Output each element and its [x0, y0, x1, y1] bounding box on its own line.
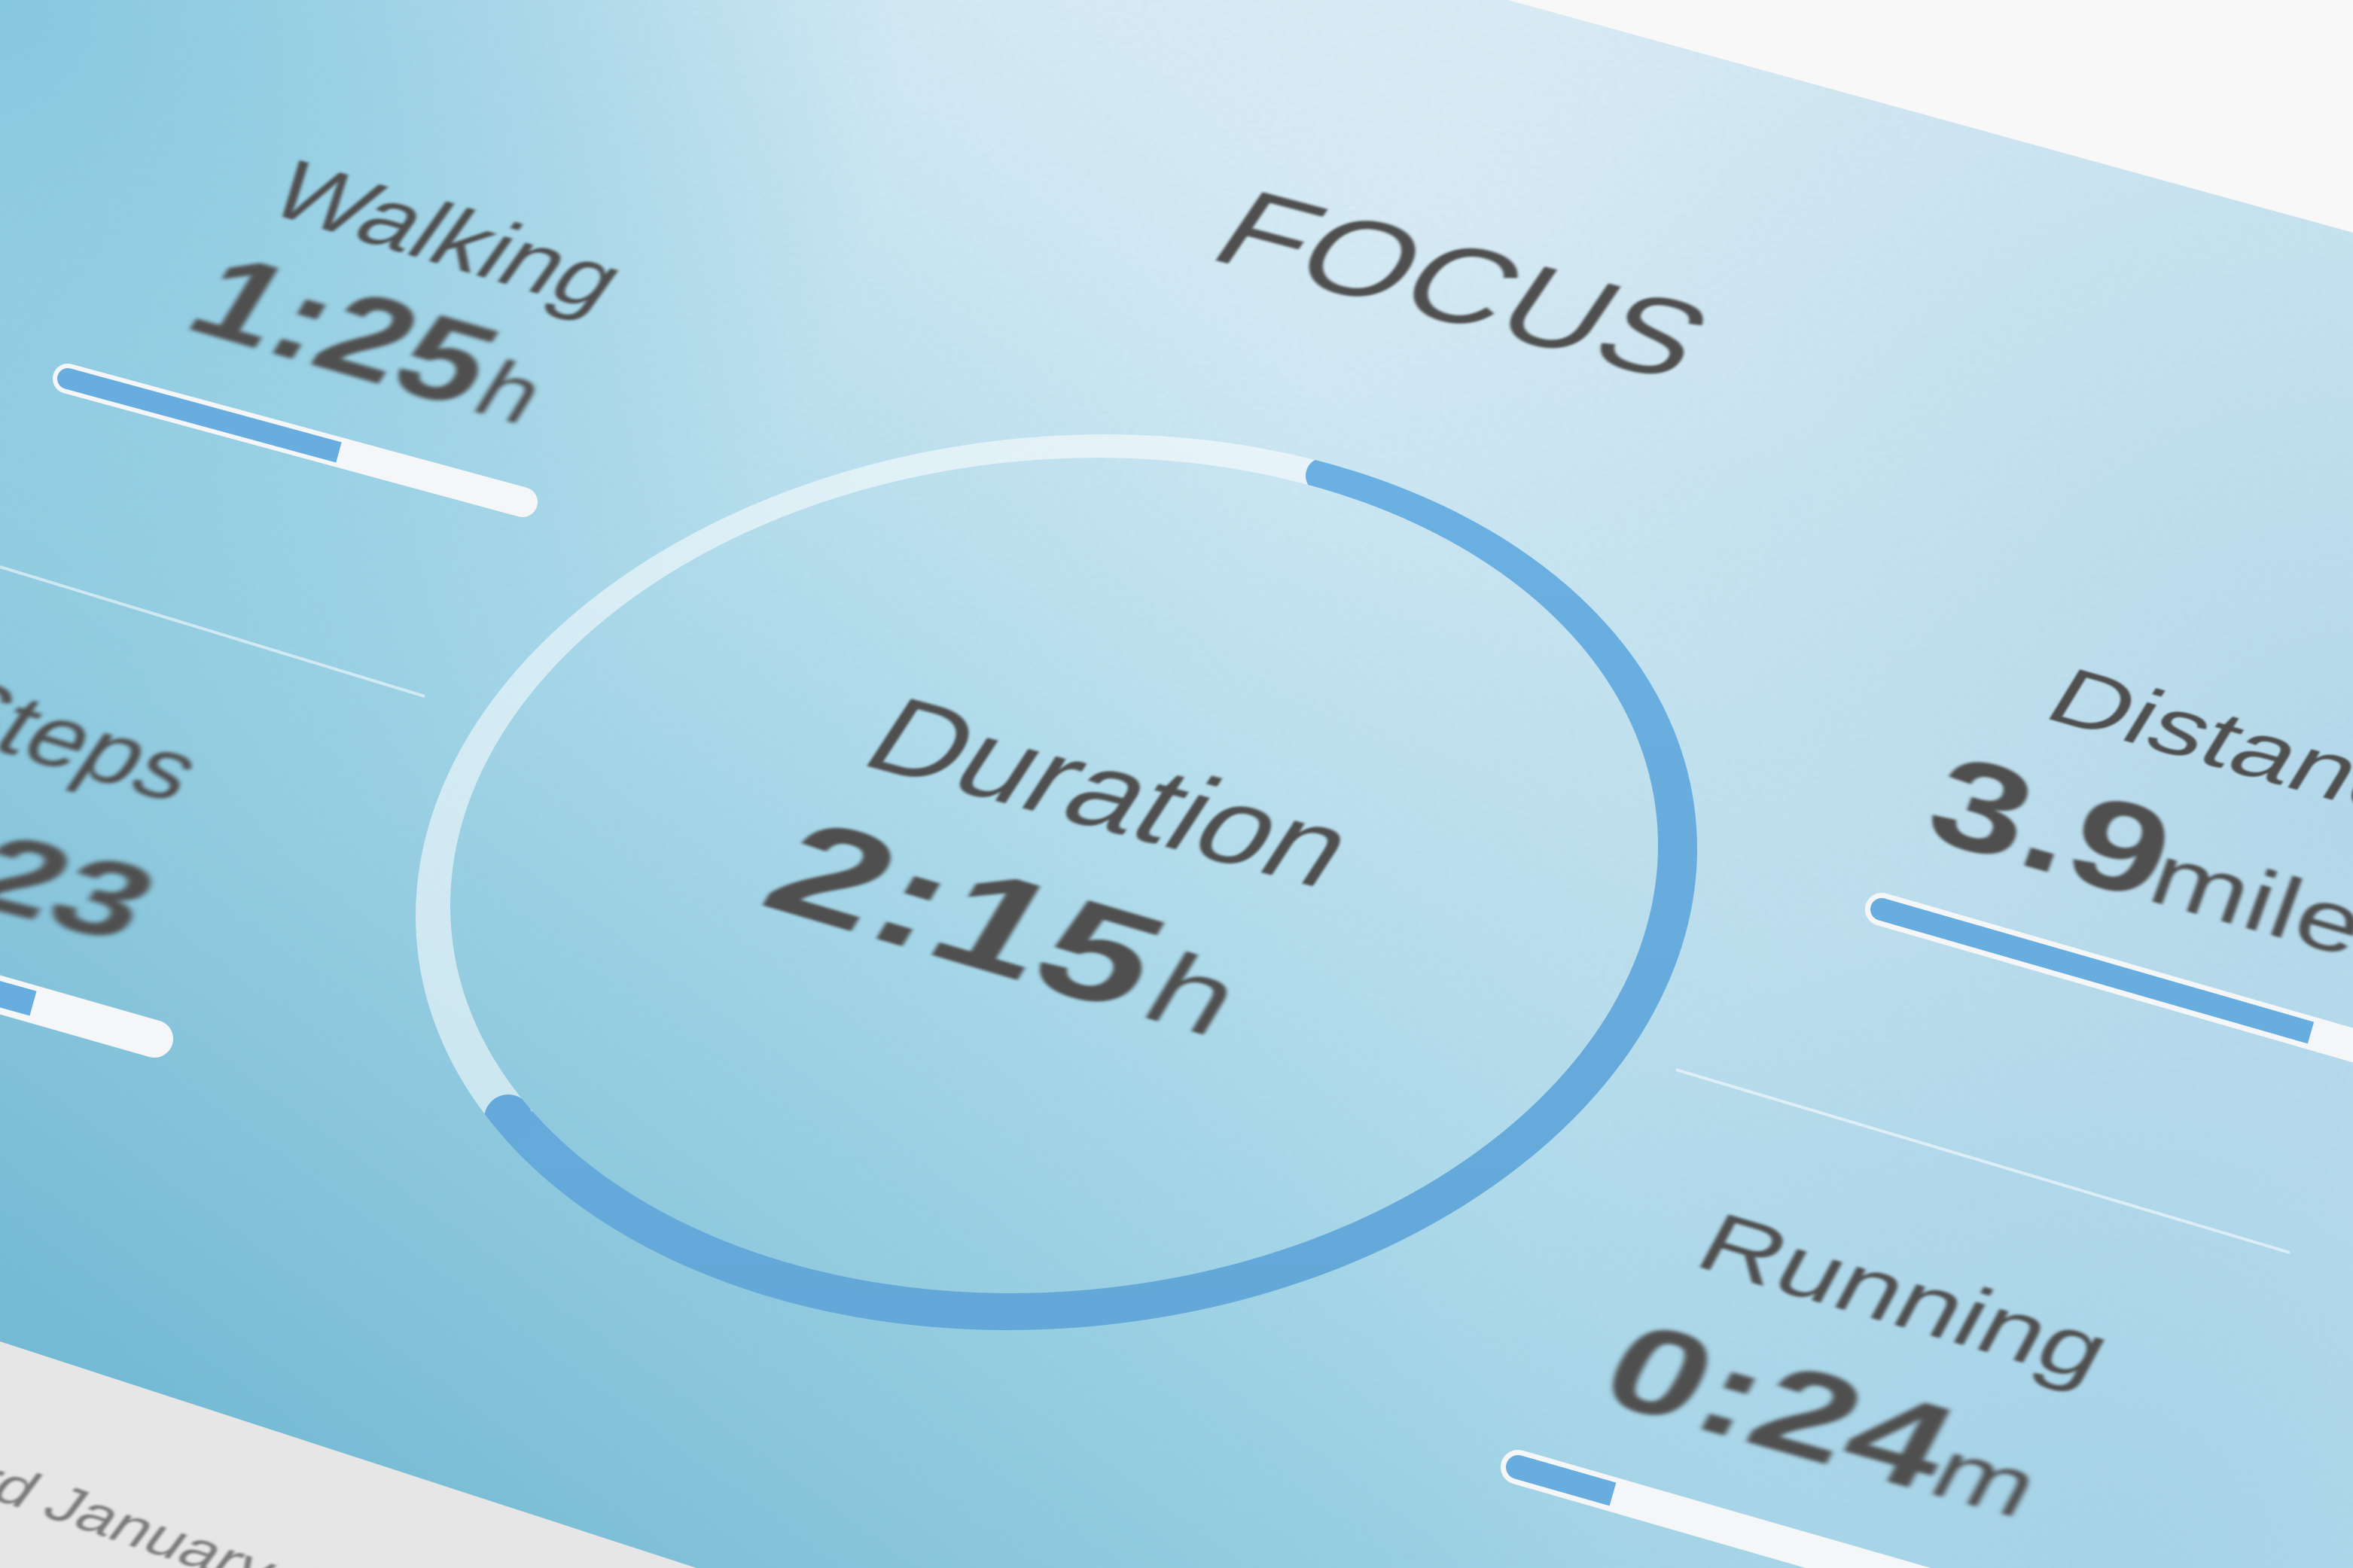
progress bar: steps	[0, 973, 154, 1039]
metric: walking	[57, 144, 645, 502]
divider: left	[0, 567, 425, 696]
ring track	[416, 434, 1315, 1114]
progress bar: running	[1506, 1455, 2033, 1568]
value: 0:24m: 0:24m	[1580, 1296, 2073, 1542]
value: 1:25h: 1:25h	[166, 230, 581, 448]
metric: steps	[0, 658, 221, 1039]
label: Running: Running	[1682, 1196, 2126, 1399]
ring progress arc	[508, 467, 1697, 1330]
arc start cap	[1306, 460, 1331, 487]
label: Duration: Duration	[843, 675, 1379, 909]
arc end cap	[485, 1095, 532, 1128]
metric: distance	[1870, 651, 2353, 1083]
metric: running	[1506, 1196, 2126, 1568]
progress bar: distance	[1870, 898, 2353, 1083]
background: top right white surface	[1508, 0, 2353, 233]
panel: bottom left white paper strip	[0, 1341, 696, 1568]
title: FOCUS: FOCUS	[1190, 168, 1735, 403]
progress bar: walking	[57, 368, 523, 502]
chart: duration progress ring	[416, 434, 1697, 1330]
value: 2:15h: 2:15h	[740, 791, 1280, 1064]
divider: right	[1676, 1070, 2290, 1253]
label: Walking: Walking	[251, 144, 645, 327]
